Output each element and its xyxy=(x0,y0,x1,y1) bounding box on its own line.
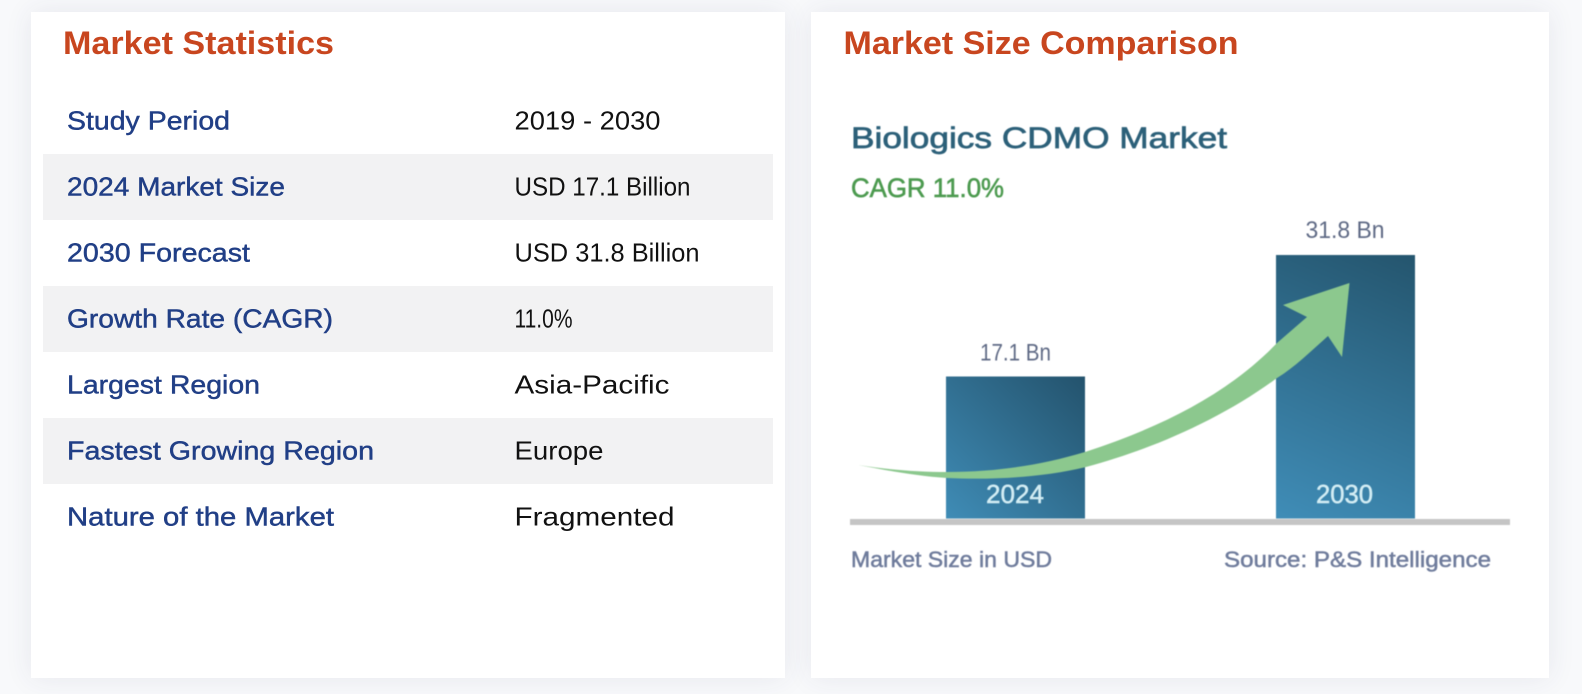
panel: market size comparison xyxy=(811,12,1549,678)
row: 2030 forecast xyxy=(67,238,700,268)
heading: market size comparison: Market Size Comparison xyxy=(844,25,1238,61)
row: largest region: Largest Region xyxy=(67,370,260,400)
row: 2030 forecast: 2030 Forecast xyxy=(67,238,251,268)
row: study period: Study Period xyxy=(67,106,230,136)
value label: 17.1 Bn: 17.1 Bn xyxy=(980,340,1051,366)
row: growth rate: Growth Rate (CAGR) xyxy=(67,304,333,334)
row: largest region xyxy=(67,370,670,400)
row: study period: 2019 - 2030 xyxy=(514,106,660,136)
row: nature of the market: Nature of the Market xyxy=(67,502,335,532)
row: study period xyxy=(67,106,660,136)
row: fastest growing region xyxy=(43,418,773,484)
chart: biologics cdmo market xyxy=(850,122,1510,572)
row: 2024 market size: USD 17.1 Billion xyxy=(514,172,690,202)
year label: 2030: 2030 xyxy=(1316,479,1373,509)
cagr label: CAGR 11.0% xyxy=(851,173,1004,203)
row: fastest growing region: Fastest Growing Region xyxy=(67,436,374,466)
chart title: Biologics CDMO Market xyxy=(851,122,1228,155)
table: statistics rows xyxy=(43,106,773,532)
row: largest region: Asia-Pacific xyxy=(514,370,670,400)
axis caption: Market Size in USD xyxy=(851,547,1052,572)
axis line xyxy=(850,519,1510,525)
row: growth rate xyxy=(43,286,773,352)
heading: market statistics: Market Statistics xyxy=(63,25,334,61)
bar: 2030 xyxy=(1276,255,1415,518)
row: nature of the market xyxy=(67,502,674,532)
row: 2024 market size xyxy=(43,154,773,220)
row: growth rate: 11.0% xyxy=(514,304,572,334)
year label: 2024: 2024 xyxy=(986,479,1044,509)
value label: 31.8 Bn: 31.8 Bn xyxy=(1306,217,1384,244)
source note: Source: P&S Intelligence xyxy=(1224,547,1491,572)
row: 2030 forecast: USD 31.8 Billion xyxy=(514,238,700,268)
bar: 2024 xyxy=(946,376,1085,518)
panel: market statistics xyxy=(31,12,785,678)
row: nature of the market: Fragmented xyxy=(514,502,674,532)
row: fastest growing region: Europe xyxy=(514,436,604,466)
arrow: growth curve xyxy=(858,283,1350,479)
row: 2024 market size: 2024 Market Size xyxy=(67,172,285,202)
